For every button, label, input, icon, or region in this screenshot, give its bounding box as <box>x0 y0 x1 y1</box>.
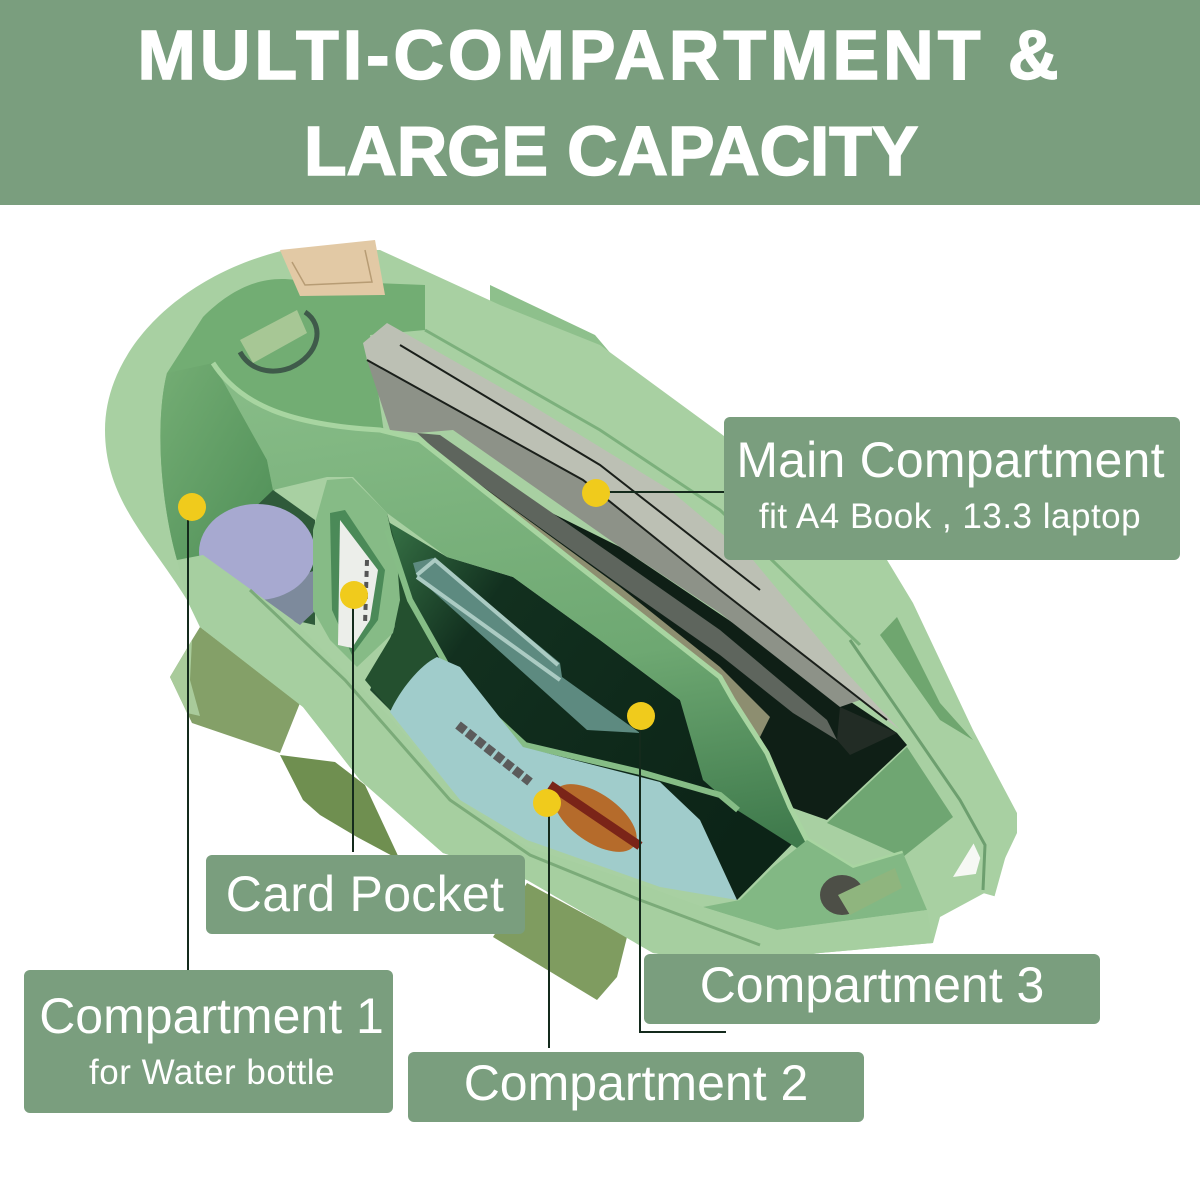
compartment 2 heading: Compartment 2 <box>464 1055 808 1111</box>
compartment 1 heading: Compartment 1 <box>39 988 384 1044</box>
back rim seam <box>425 330 860 645</box>
packet label ribbon <box>550 785 640 846</box>
yellow marker dots <box>178 479 655 817</box>
divider light edge <box>213 363 903 868</box>
front rim zipper <box>250 590 760 945</box>
olive strap lower section <box>280 755 400 860</box>
olive strap light edge <box>170 640 200 716</box>
tan book edge <box>440 463 770 737</box>
compartment 3 heading: Compartment 3 <box>700 957 1044 1013</box>
leather tab <box>280 240 385 296</box>
inner handle gap <box>880 617 973 740</box>
label: main compartment <box>724 417 1180 560</box>
leader lines <box>188 492 726 1048</box>
white gap at right <box>953 833 983 877</box>
label: compartment 1 <box>24 970 393 1113</box>
left compartment wall <box>160 363 273 560</box>
divider panel <box>213 363 853 868</box>
bag outer body <box>105 250 1017 965</box>
main compartment heading: Main Compartment <box>736 432 1165 488</box>
card pocket inner <box>330 510 385 655</box>
label: card pocket <box>206 855 525 934</box>
main compartment note: fit A4 Book , 13.3 laptop <box>759 497 1141 536</box>
right rim zipper <box>850 640 985 890</box>
main compartment dark interior <box>385 430 907 820</box>
packet label badge <box>542 771 648 865</box>
water bottle lid <box>199 504 315 600</box>
compartment 3 pocket lip <box>387 530 738 810</box>
label: compartment 3 <box>644 954 1100 1024</box>
packet printed text <box>458 725 530 782</box>
header banner <box>0 0 1200 205</box>
page lines <box>367 345 887 720</box>
title line 1: MULTI-COMPARTMENT & <box>138 16 1062 94</box>
area right of card pocket <box>365 513 437 710</box>
front rim <box>177 555 933 965</box>
wallet light edge <box>417 560 560 680</box>
compartment 1 note: for Water bottle <box>89 1053 335 1092</box>
label: compartment 2 <box>408 1052 864 1122</box>
wipes packet <box>390 657 737 900</box>
right rim strip <box>863 643 993 893</box>
compartment 3 dark interior <box>370 520 803 900</box>
water bottle side <box>205 565 316 625</box>
right dark bag floor <box>837 707 897 755</box>
leather stitching <box>292 250 372 285</box>
olive handle strap bottom <box>493 883 627 1000</box>
title line 2: LARGE CAPACITY <box>304 112 918 190</box>
book pages <box>363 323 900 730</box>
back handle strap <box>490 285 612 365</box>
wallet <box>413 558 640 733</box>
D-ring strap <box>240 310 307 363</box>
book cover <box>367 360 860 707</box>
olive handle strap left <box>170 627 300 753</box>
D-ring <box>240 312 317 371</box>
back interior wall <box>160 279 425 560</box>
right inner wall <box>827 747 953 857</box>
dark area around bottle <box>200 490 315 625</box>
laptop <box>417 433 837 740</box>
card pocket heading: Card Pocket <box>226 866 504 922</box>
card lettering <box>365 560 367 625</box>
lower D-ring buckle <box>820 875 864 915</box>
lower right floor <box>703 840 927 930</box>
lower D-ring strap <box>838 868 902 915</box>
card <box>338 520 378 648</box>
card pocket <box>313 478 400 667</box>
